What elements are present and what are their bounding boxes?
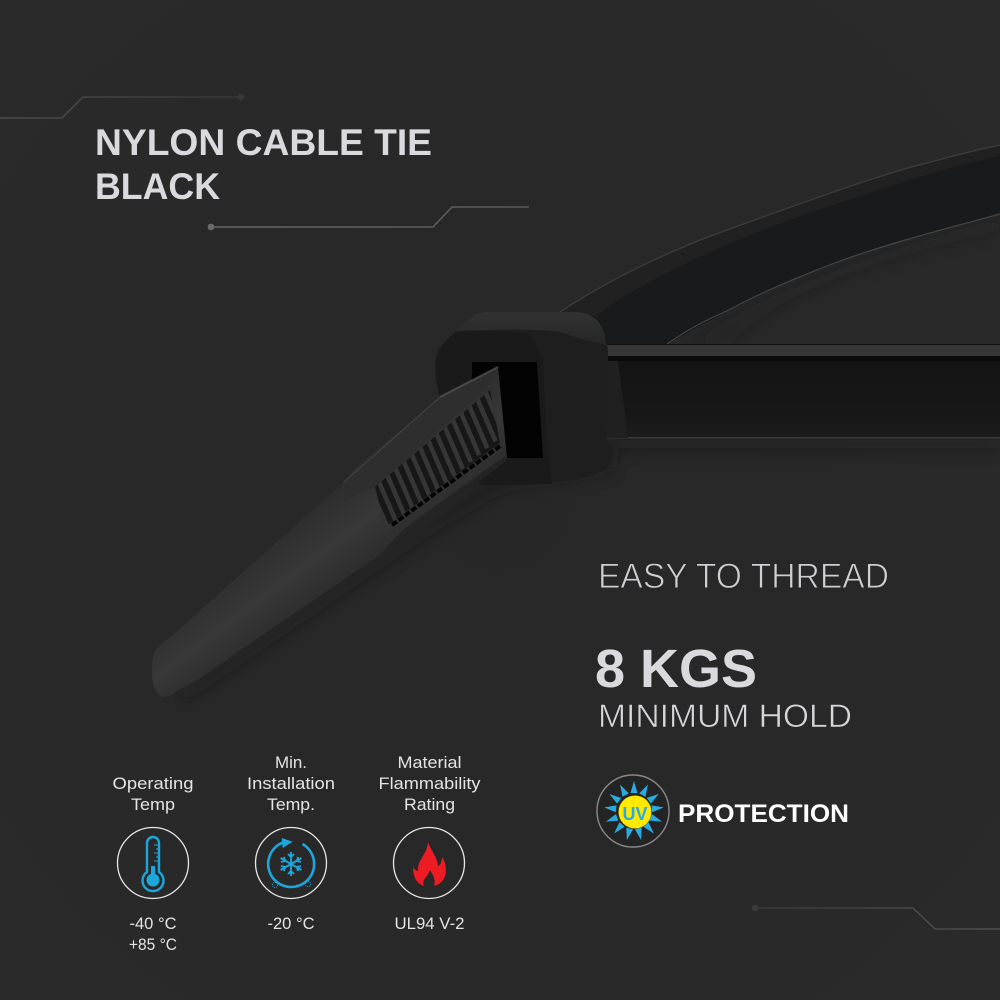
headline: 8 kgs: 8 KGS <box>595 639 757 699</box>
operating temp label: Temp <box>131 795 175 814</box>
operating temp values: +85 °C <box>129 935 177 954</box>
locking head <box>435 312 612 485</box>
operating temp values: -40 °C <box>130 914 176 933</box>
decorative line: bottom right <box>752 905 1000 929</box>
title: BLACK <box>95 166 220 207</box>
flammability label: Flammability <box>378 774 481 793</box>
flammability label: Rating <box>404 795 455 814</box>
label: protection: PROTECTION <box>678 800 849 828</box>
spec: flammability rating <box>378 753 481 933</box>
installation temp label: Installation <box>247 774 335 793</box>
icon: cold cycle <box>256 828 326 898</box>
product photo: cable tie <box>152 145 1000 704</box>
upper strap <box>560 145 1000 345</box>
head front face <box>436 331 552 485</box>
decorative line: top left <box>0 94 244 118</box>
title <box>95 122 432 207</box>
spec: min installation temp <box>247 753 335 933</box>
installation temp label: Min. <box>275 753 307 772</box>
tail <box>152 367 507 697</box>
lower strap <box>605 344 1000 438</box>
icon: uv protection: UV <box>622 804 648 824</box>
operating temp label <box>112 774 194 814</box>
headline: easy to thread: EASY TO THREAD <box>598 557 889 596</box>
spec: operating temp <box>112 774 194 954</box>
sun rays <box>604 781 664 841</box>
icon: flame <box>394 828 464 898</box>
tail teeth <box>392 446 500 525</box>
installation temp label <box>247 753 335 814</box>
title: NYLON CABLE TIE <box>95 122 432 163</box>
head slot <box>472 362 543 470</box>
tie shadow <box>178 218 1000 704</box>
decorative line: under title <box>208 207 529 230</box>
installation temp label: Temp. <box>267 795 315 814</box>
subhead: minimum hold: MINIMUM HOLD <box>598 698 852 734</box>
flammability label: Material <box>398 753 462 772</box>
operating temp values <box>129 914 177 954</box>
icon: uv protection <box>597 775 669 847</box>
icon: thermometer <box>118 828 188 898</box>
operating temp label: Operating <box>112 774 194 793</box>
installation temp value: -20 °C <box>268 914 314 933</box>
flammability label <box>378 753 481 814</box>
head top face <box>455 312 606 345</box>
flammability value: UL94 V-2 <box>394 914 464 933</box>
tail ribs <box>378 392 498 527</box>
